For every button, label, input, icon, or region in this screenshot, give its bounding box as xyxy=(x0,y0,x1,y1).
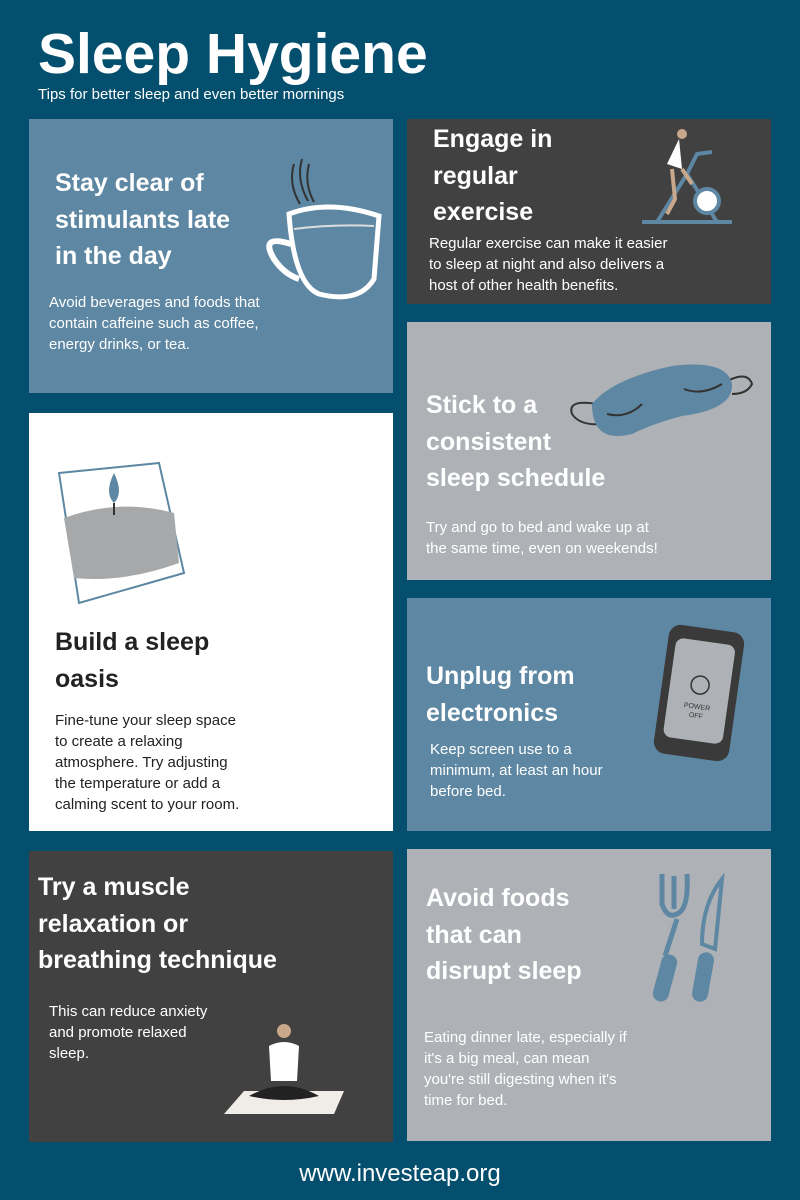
text: This can reduce anxiety xyxy=(49,1003,207,1020)
text xyxy=(55,712,239,813)
icon: phone: OFF xyxy=(688,712,703,721)
panel: electronics xyxy=(407,598,771,831)
panel: schedule xyxy=(407,322,771,580)
subtitle: Tips for better sleep and even better mornings xyxy=(38,86,344,103)
text: Try and go to bed and wake up at xyxy=(426,519,649,536)
heading: Stick to a xyxy=(426,391,537,419)
heading: consistent xyxy=(426,428,551,456)
text: host of other health benefits. xyxy=(429,277,618,294)
text: it's a big meal, can mean xyxy=(424,1050,589,1067)
text: the same time, even on weekends! xyxy=(426,540,658,557)
heading: Stay clear of xyxy=(55,169,204,197)
text: Keep screen use to a xyxy=(430,741,572,758)
heading: regular xyxy=(433,162,518,190)
footer url: www.investeap.org xyxy=(299,1160,501,1187)
text xyxy=(430,741,603,800)
heading xyxy=(55,169,230,270)
text: Regular exercise can make it easier xyxy=(429,235,667,252)
text: to sleep at night and also delivers a xyxy=(429,256,664,273)
text xyxy=(49,294,260,353)
text: to create a relaxing xyxy=(55,733,183,750)
heading: Avoid foods xyxy=(426,884,570,912)
text: and promote relaxed xyxy=(49,1024,187,1041)
text: calming scent to your room. xyxy=(55,796,239,813)
title: Sleep Hygiene xyxy=(38,22,428,86)
heading: in the day xyxy=(55,242,172,270)
text xyxy=(429,235,668,294)
text xyxy=(424,1029,627,1109)
heading: Build a sleep xyxy=(55,628,209,656)
heading: breathing technique xyxy=(38,946,277,974)
icon: phone: POWER xyxy=(683,702,711,713)
text: Fine-tune your sleep space xyxy=(55,712,236,729)
panel: relaxation xyxy=(29,851,393,1142)
heading: that can xyxy=(426,920,522,948)
heading: Unplug from xyxy=(426,662,575,690)
panel: stimulants xyxy=(29,119,393,393)
text: before bed. xyxy=(430,783,506,800)
text: energy drinks, or tea. xyxy=(49,336,190,353)
heading: electronics xyxy=(426,698,558,726)
panel: exercise xyxy=(407,119,771,304)
heading xyxy=(38,873,277,974)
heading: disrupt sleep xyxy=(426,957,582,985)
heading xyxy=(433,125,552,226)
heading xyxy=(426,662,575,726)
heading xyxy=(55,628,209,692)
text: you're still digesting when it's xyxy=(424,1071,616,1088)
panel: foods xyxy=(407,849,771,1141)
icon: cyclist xyxy=(642,129,732,224)
text: minimum, at least an hour xyxy=(430,762,603,779)
text xyxy=(49,1003,208,1062)
icon: meditating person xyxy=(224,1024,344,1114)
heading xyxy=(426,884,582,985)
heading: Engage in xyxy=(433,125,552,153)
text: Eating dinner late, especially if xyxy=(424,1029,627,1046)
text: the temperature or add a xyxy=(55,775,220,792)
text: atmosphere. Try adjusting xyxy=(55,754,228,771)
heading: relaxation or xyxy=(38,910,188,938)
text xyxy=(426,519,658,557)
heading: exercise xyxy=(433,198,533,226)
icon: candle xyxy=(58,462,186,604)
icon: phone xyxy=(654,624,744,762)
heading: Try a muscle xyxy=(38,873,189,901)
text: time for bed. xyxy=(424,1092,507,1109)
icon: fork and knife xyxy=(652,872,725,1002)
text: Avoid beverages and foods that xyxy=(49,294,260,311)
heading: stimulants late xyxy=(55,206,230,234)
heading xyxy=(426,391,605,492)
heading: sleep schedule xyxy=(426,464,605,492)
panel: sleep oasis xyxy=(29,413,393,831)
icon: mug xyxy=(266,158,382,300)
heading: oasis xyxy=(55,664,119,692)
icon: sleep mask xyxy=(570,364,753,436)
text: sleep. xyxy=(49,1045,89,1062)
text: contain caffeine such as coffee, xyxy=(49,315,259,332)
